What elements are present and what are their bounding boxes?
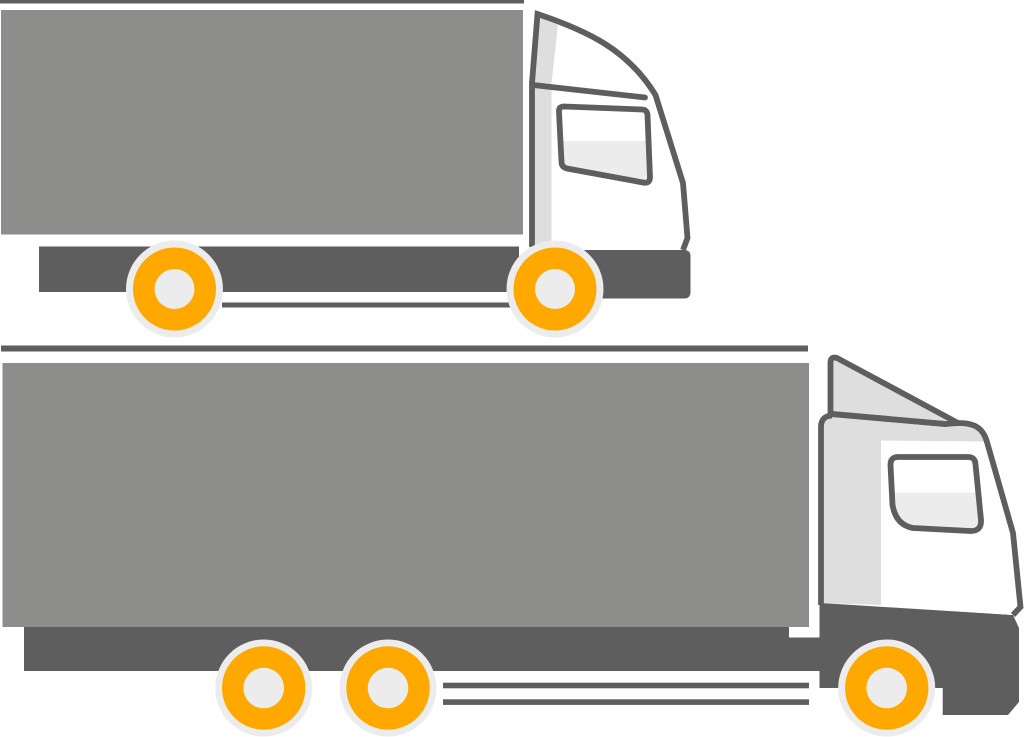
window lower shade: [561, 141, 650, 183]
truck 1: small two-axle truck: [0, 0, 690, 338]
truck 2 cab lower body: [820, 602, 1019, 715]
cab outline: [532, 14, 688, 250]
cab grey upper and rear panel: [821, 416, 985, 605]
cab fill: [821, 416, 1020, 615]
truck 1 rear chassis: [39, 246, 519, 292]
cab grey pillar: [534, 17, 558, 246]
truck 2: long three-axle truck: [1, 346, 1020, 736]
truck 2 lower side bar: [443, 699, 809, 705]
cab roof line: [833, 414, 945, 424]
truck 1 cab front chassis: [530, 250, 690, 298]
truck 2 front wheel: [838, 640, 935, 736]
cab roof line: [533, 85, 645, 98]
spoiler: [830, 358, 958, 424]
truck 2 roof bar: [1, 346, 808, 352]
cab window: [890, 457, 981, 531]
truck 1 side bar: [222, 302, 512, 308]
truck 1 front wheel: [506, 240, 604, 338]
window fill: [890, 457, 981, 531]
cab window: [559, 106, 650, 183]
truck 2 rear wheel two: [340, 640, 436, 736]
window lower shade: [892, 492, 981, 531]
truck 2 chassis: [24, 627, 820, 671]
window outline: [890, 457, 981, 531]
truck 2 cab body: [821, 358, 1020, 615]
window fill: [559, 106, 650, 183]
cab fill: [532, 14, 688, 250]
truck 2 rear wheel one: [215, 640, 312, 736]
truck 1 rear wheel: [126, 240, 223, 338]
cab outline: [821, 416, 1020, 615]
truck 1 cargo box: [1, 10, 523, 234]
truck 1 roof bar: [0, 0, 524, 4]
truck 2 upper side bar: [443, 683, 809, 688]
truck 1 cab body: [532, 14, 688, 250]
window outline: [559, 106, 650, 183]
truck 2 cargo box: [2, 363, 809, 627]
